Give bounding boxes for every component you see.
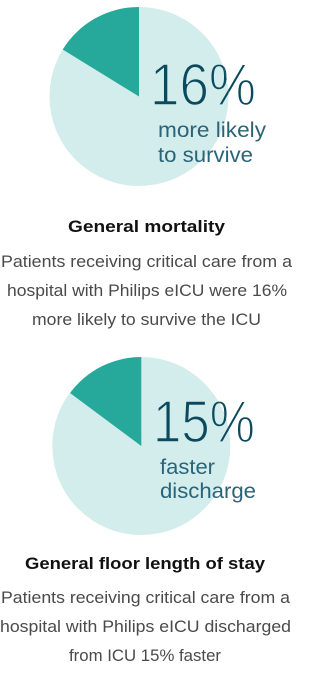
stat: 16% bbox=[154, 64, 254, 105]
text block: mortality description: more likely to survive the ICU bbox=[32, 310, 261, 329]
text block: mortality description: hospital with Philips eICU were 16% bbox=[7, 281, 287, 300]
stat: 15%: 15% bbox=[153, 389, 255, 455]
text block: length of stay description: hospital with Philips eICU discharged bbox=[0, 617, 291, 636]
heading: general floor length of stay: General floor length of stay bbox=[25, 554, 266, 573]
stat: 15% bbox=[158, 401, 252, 442]
panel: general mortality bbox=[1, 7, 293, 329]
stat: 16%: 16% bbox=[150, 52, 256, 118]
stat: 15%: 15% bbox=[153, 389, 255, 455]
text block: mortality description bbox=[1, 252, 293, 329]
text block: length of stay description: Patients receiving critical care from a bbox=[1, 588, 291, 607]
pie chart: 15 percent bbox=[52, 357, 230, 535]
stat label: more likely to survive bbox=[158, 119, 267, 167]
text block: length of stay description: from ICU 15% faster bbox=[69, 646, 221, 665]
stat label: more likely to survive: to survive bbox=[158, 144, 253, 167]
text block: mortality description: Patients receiving critical care from a bbox=[1, 252, 293, 271]
pie chart: 16 percent bbox=[50, 7, 228, 186]
text block: length of stay description bbox=[0, 588, 291, 665]
panel: general floor length of stay bbox=[0, 357, 291, 665]
stat label: more likely to survive: more likely bbox=[158, 119, 267, 142]
stat label: faster discharge: faster bbox=[160, 456, 215, 479]
heading: general mortality: General mortality bbox=[68, 217, 226, 236]
stat label: faster discharge bbox=[160, 456, 256, 503]
stat label: faster discharge: discharge bbox=[160, 480, 256, 503]
stat: 16%: 16% bbox=[150, 52, 256, 118]
